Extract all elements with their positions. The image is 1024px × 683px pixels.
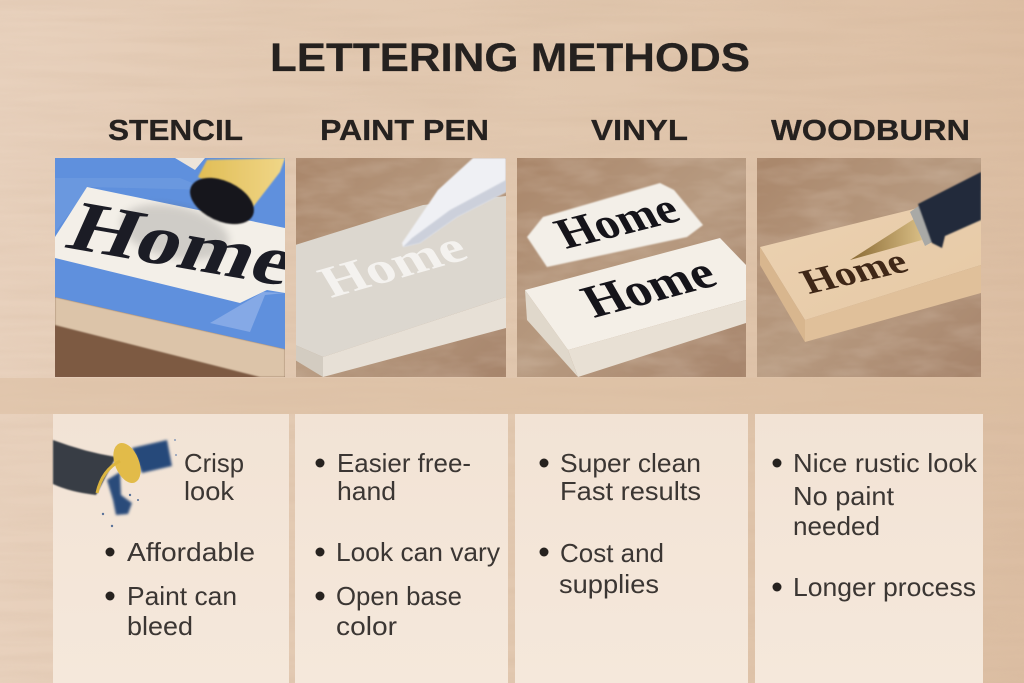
panel: stencil points: Paint can — [127, 581, 237, 611]
panel: stencil points: look — [184, 476, 235, 506]
panel: paint pen points: color — [336, 611, 397, 641]
heading: stencil: STENCIL — [108, 115, 243, 147]
photo: vinyl — [517, 158, 746, 377]
stencil label — [55, 187, 285, 303]
panel: vinyl points: Cost and — [560, 538, 664, 568]
heading: vinyl: VINYL — [591, 115, 688, 147]
sponge dauber — [198, 158, 285, 207]
panel: vinyl points: Fast results — [560, 476, 701, 506]
panel: paint pen points: hand — [337, 476, 396, 506]
photo: vinyl: Home — [546, 183, 687, 258]
panel: vinyl points — [515, 414, 748, 683]
panel: woodburn points: Longer process — [793, 572, 976, 602]
icon: stencil brush — [53, 439, 177, 527]
panel: stencil points: bleed — [127, 611, 193, 641]
panel: paint pen points: Open base — [336, 581, 462, 611]
photo: vinyl: Home — [572, 246, 725, 328]
photo: woodburn: Home — [793, 241, 914, 301]
panel: stencil points: Affordable — [127, 537, 255, 567]
photo: stencil: Home — [56, 187, 310, 301]
peeled tape — [210, 292, 285, 332]
panel: woodburn points: needed — [793, 511, 880, 541]
panel: stencil points — [53, 414, 289, 683]
panel: paint pen points: Look can vary — [336, 537, 500, 567]
photo: woodburn — [757, 158, 981, 377]
panel: woodburn points: No paint — [793, 481, 895, 511]
panel: stencil points: Crisp — [184, 448, 244, 478]
photo: paint pen: Home — [310, 222, 476, 308]
heading: paint pen: PAINT PEN — [320, 115, 489, 147]
vinyl peeled tag — [527, 183, 703, 267]
heading: woodburn: WOODBURN — [771, 115, 970, 147]
title: LETTERING METHODS — [270, 36, 750, 80]
panel: woodburn points: Nice rustic look — [793, 448, 978, 478]
panel: vinyl points: supplies — [559, 569, 659, 599]
panel: paint pen points: Easier free- — [337, 448, 471, 478]
panel: vinyl points: Super clean — [560, 448, 701, 478]
vinyl block — [525, 238, 746, 350]
panel: woodburn points — [755, 414, 983, 683]
photo: paint pen — [295, 158, 506, 377]
paint pen — [402, 158, 506, 247]
panel: paint pen points — [295, 414, 508, 683]
stipple — [118, 202, 232, 262]
woodburning pen — [850, 219, 922, 260]
photo: stencil — [55, 158, 310, 377]
